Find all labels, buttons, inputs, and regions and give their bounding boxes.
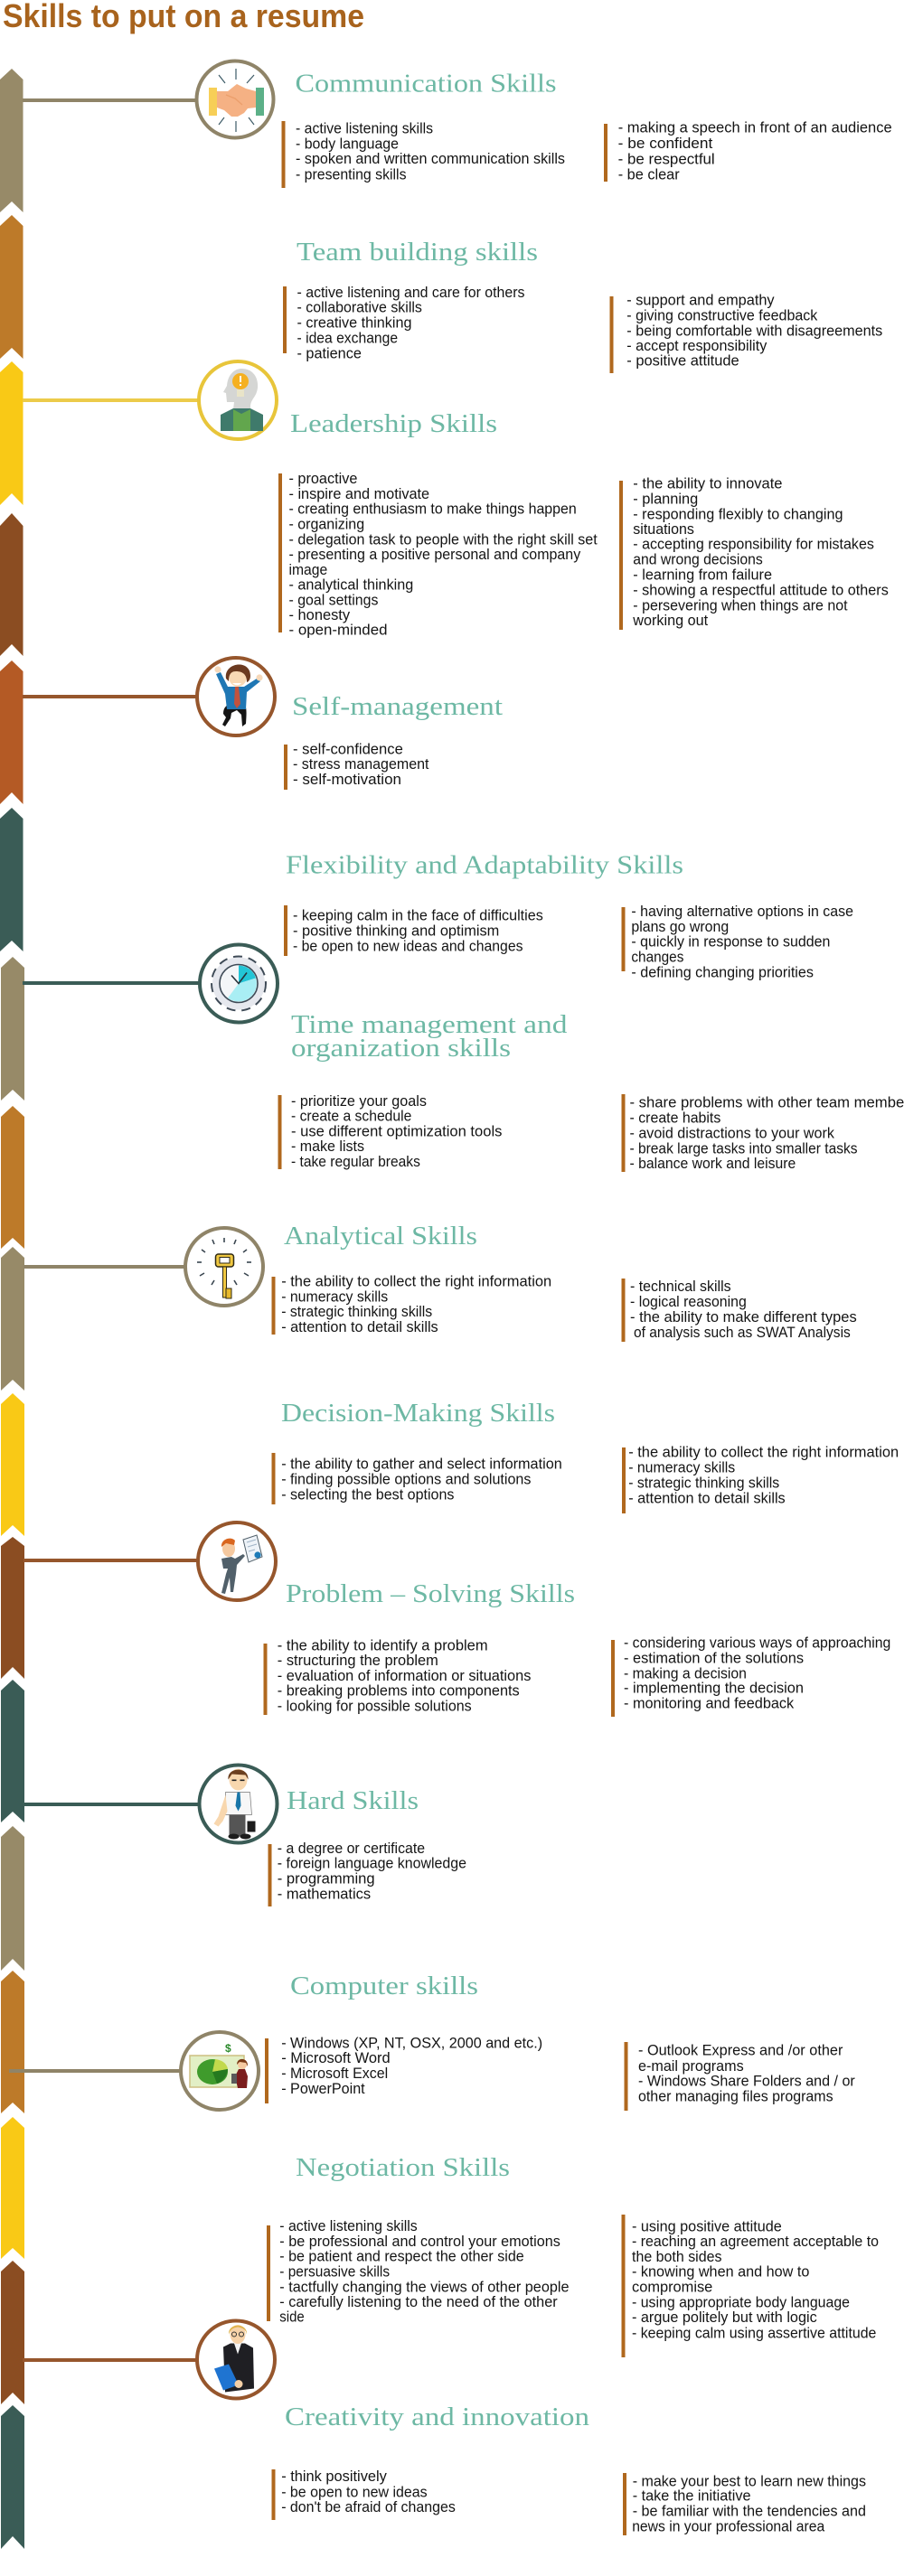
text block: negotiation left: - active listening skills [279, 2218, 418, 2234]
text block: team building right: - positive attitude [626, 353, 739, 370]
connector lines [9, 98, 201, 2362]
text block: analytical right [622, 1279, 857, 1342]
text block: time management left: - create a schedule [291, 1109, 411, 1125]
text block: leadership right: - showing a respectful attitude to others [633, 582, 889, 598]
text block: creativity left: - think positively [281, 2468, 388, 2485]
text block: communication right: - be respectful [618, 151, 715, 167]
text block: problem solving right: - considering various ways of approaching [624, 1635, 890, 1652]
text block: leadership left: - creating enthusiasm to make things happen [289, 501, 577, 518]
text block: time management right: - break large tasks into smaller tasks [629, 1140, 857, 1157]
text block: leadership right [619, 476, 889, 630]
text block: negotiation left: - carefully listening to the need of the other [279, 2294, 558, 2310]
text block: communication left: - body language [296, 136, 399, 152]
text block: self-management: - self-confidence [293, 741, 403, 757]
text block: problem solving left: - breaking problems into components [278, 1683, 520, 1700]
icon: businessman with briefcase [199, 1766, 277, 1843]
text block: team building left: - collaborative skills [297, 300, 422, 316]
text block: negotiation left: - be patient and respect the other side [279, 2249, 524, 2265]
text block: leadership left: image [289, 562, 327, 578]
text block: problem solving left: - looking for possible solutions [278, 1699, 472, 1715]
heading: Flexibility and Adaptability Skills: Flexibility and Adaptability Skills [286, 851, 683, 880]
text block: problem solving left: - the ability to identify a problem [278, 1637, 488, 1653]
text block: hard skills [268, 1841, 466, 1906]
heading: Computer skills: Computer skills [290, 1972, 478, 2000]
text block: analytical left: - numeracy skills [281, 1288, 388, 1305]
heading: Communication Skills: Communication Skills [295, 70, 557, 98]
text block: analytical right: - technical skills [630, 1279, 731, 1295]
text block: creativity left: - be open to new ideas [281, 2484, 428, 2500]
icon: leadership head with light bulb [199, 361, 277, 439]
heading: Decision-Making Skills: Decision-Making Skills [281, 1399, 555, 1428]
text block: communication left: - active listening skills [296, 120, 433, 136]
text block: problem solving left [264, 1637, 531, 1715]
text block: team building right: - being comfortable with disagreements [626, 323, 882, 339]
text block: communication right: - making a speech in front of an audience [618, 120, 892, 136]
text block: negotiation right: - keeping calm using assertive attitude [632, 2325, 876, 2341]
text block: time management left [278, 1093, 502, 1170]
text block: problem solving right [611, 1635, 890, 1717]
text block: leadership left: - open-minded [289, 623, 387, 639]
text block: leadership left: - organizing [289, 517, 364, 533]
text block: computer skills left: - Microsoft Word [281, 2050, 391, 2066]
text block: creativity right: - make your best to learn new things [633, 2473, 866, 2489]
text block: communication right: - be confident [618, 136, 713, 152]
text block: flexibility right: - defining changing priorities [631, 964, 814, 980]
text block: creativity left [271, 2468, 456, 2520]
heading: Analytical Skills: Analytical Skills [284, 1222, 477, 1251]
text block: negotiation left: side [279, 2309, 305, 2326]
timeline: segmented arrow column [0, 69, 24, 2549]
text block: leadership right: working out [632, 613, 709, 629]
text block: flexibility left: - positive thinking and optimism [293, 923, 499, 940]
text block: analytical right: of analysis such as SWAT Analysis [634, 1325, 851, 1341]
heading: Self-management: Self-management [292, 692, 503, 721]
text block: problem solving right: - monitoring and feedback [624, 1696, 795, 1712]
text block: analytical left: - attention to detail skills [281, 1319, 438, 1335]
text block: leadership right: - planning [633, 492, 698, 508]
text block: flexibility right: plans go wrong [631, 919, 729, 935]
text block: negotiation right: - reaching an agreement acceptable to [632, 2234, 879, 2250]
text block: time management right: - balance work and leisure [629, 1156, 796, 1172]
text block: leadership right: situations [633, 521, 694, 538]
text block: leadership right: - learning from failure [633, 567, 772, 584]
text block: decision-making right: - numeracy skills [628, 1459, 735, 1475]
text block: hard skills: - mathematics [278, 1886, 371, 1902]
text block: decision-making right: - the ability to collect the right information [628, 1445, 899, 1461]
text block: negotiation right: - using positive attitude [632, 2218, 782, 2234]
text block: negotiation right: - knowing when and how to [632, 2264, 809, 2281]
text block: creativity right [623, 2473, 866, 2535]
text block: analytical left: - strategic thinking skills [281, 1304, 432, 1320]
text block: communication right: - be clear [618, 167, 680, 183]
text block: decision-making left: - selecting the best options [281, 1486, 454, 1503]
text block: self-management [284, 741, 429, 790]
text block: problem solving right: - estimation of the solutions [624, 1650, 804, 1666]
text block: creativity right: news in your professional area [632, 2519, 825, 2535]
text block: communication right [604, 120, 892, 183]
text block: leadership left: - analytical thinking [289, 577, 413, 594]
text block: leadership left [278, 471, 598, 639]
text block: flexibility left [284, 905, 543, 956]
text block: problem solving left: - structuring the problem [278, 1653, 438, 1669]
text block: leadership left: - delegation task to people with the right skill set [289, 531, 598, 548]
text block: time management left: - prioritize your goals [291, 1093, 427, 1110]
text block: flexibility left: - keeping calm in the face of difficulties [293, 907, 543, 923]
text block: leadership right: - responding flexibly to changing [633, 506, 843, 522]
text block: team building right: - accept responsibility [626, 338, 767, 354]
text block: negotiation left: - persuasive skills [279, 2264, 390, 2281]
text block: time management left: - make lists [291, 1138, 364, 1155]
text block: negotiation right: the both sides [632, 2249, 721, 2265]
text block: problem solving left: - evaluation of information or situations [278, 1668, 531, 1684]
text block: analytical left: - the ability to collect the right information [281, 1273, 551, 1289]
text block: leadership left: - proactive [289, 471, 357, 487]
heading: Negotiation Skills: Negotiation Skills [296, 2153, 510, 2182]
text block: negotiation left [267, 2218, 570, 2326]
icon: presentation with pie chart: $ [225, 2042, 231, 2055]
icon: man with certificate [198, 1522, 276, 1600]
text block: flexibility left: - be open to new ideas and changes [293, 938, 523, 954]
text block: leadership left: - honesty [289, 607, 351, 623]
text block: flexibility right: - quickly in response to sudden [631, 934, 830, 951]
text block: leadership right: and wrong decisions [633, 552, 763, 568]
text block: analytical left [271, 1273, 551, 1335]
heading: Leadership Skills: Leadership Skills [290, 409, 497, 438]
text block: time management right: - avoid distractions to your work [629, 1125, 835, 1141]
text block: computer skills right: other managing files programs [638, 2089, 833, 2105]
text block: time management right [622, 1094, 904, 1172]
text block: creativity right: - be familiar with the tendencies and [633, 2503, 866, 2519]
heading: Time management and organization skills: Time management and [291, 1010, 568, 1039]
text block: self-management: - stress management [293, 756, 429, 773]
icon: presentation with pie chart [181, 2032, 259, 2110]
text block: hard skills: - foreign language knowledge [278, 1856, 466, 1872]
text block: problem solving right: - implementing the decision [624, 1681, 804, 1697]
text block: leadership right: - the ability to innovate [633, 476, 783, 492]
text block: time management right: - create habits [629, 1110, 720, 1127]
text block: self-management: - self-motivation [293, 772, 401, 788]
icon: handshake [197, 61, 273, 137]
text block: team building right [609, 293, 882, 373]
text block: time management left: - take regular breaks [291, 1154, 420, 1170]
text block: communication left [282, 120, 565, 188]
text block: negotiation right [622, 2215, 879, 2357]
heading: Time management and organization skills [291, 1010, 568, 1063]
icon: key [185, 1228, 263, 1306]
text block: decision-making right: - strategic thinking skills [628, 1475, 779, 1491]
text block: computer skills left: - PowerPoint [281, 2081, 365, 2097]
text block: communication left: - spoken and written communication skills [296, 151, 565, 167]
text block: computer skills right: e-mail programs [638, 2058, 744, 2075]
text block: team building left: - patience [297, 345, 362, 361]
heading: Time management and organization skills: organization skills [291, 1034, 511, 1063]
text block: leadership left: - inspire and motivate [289, 486, 429, 502]
text block: analytical right: - logical reasoning [630, 1294, 747, 1310]
icon: self-management man [197, 658, 275, 735]
text block: negotiation right: compromise [632, 2280, 712, 2296]
text block: team building left: - creative thinking [297, 315, 412, 332]
text block: leadership left: - presenting a positive personal and company [289, 547, 581, 563]
text block: computer skills right [624, 2042, 855, 2111]
text block: negotiation right: - using appropriate body language [632, 2294, 850, 2310]
text block: decision-making left: - finding possible options and solutions [281, 1472, 531, 1488]
text block: team building left [283, 285, 524, 361]
text block: decision-making right: - attention to detail skills [628, 1490, 786, 1506]
text block: negotiation left: - tactfully changing the views of other people [279, 2279, 570, 2295]
text block: leadership left: - goal settings [289, 592, 378, 608]
text block: team building right: - support and empathy [626, 293, 775, 309]
text block: computer skills left: - Microsoft Excel [281, 2065, 388, 2082]
text block: hard skills: - programming [278, 1871, 375, 1888]
text block: negotiation right: - argue politely but with logic [632, 2309, 817, 2326]
text block: computer skills left [265, 2035, 542, 2103]
text block: team building right: - giving constructive feedback [626, 307, 818, 323]
text block: team building left: - idea exchange [297, 330, 398, 346]
text block: flexibility right: - having alternative options in case [631, 904, 853, 920]
icon: businesswoman with clipboard [197, 2320, 275, 2398]
text block: computer skills right: - Outlook Express and /or other [638, 2043, 843, 2059]
text block: leadership right: - accepting responsibility for mistakes [633, 537, 874, 553]
text block: communication left: - presenting skills [296, 166, 407, 183]
heading: Creativity and innovation: Creativity and innovation [285, 2403, 590, 2431]
text block: flexibility right: changes [631, 949, 683, 965]
text block: creativity left: - don't be afraid of changes [281, 2499, 456, 2515]
text block: problem solving right: - making a decision [624, 1665, 747, 1681]
text block: decision-making left: - the ability to gather and select information [281, 1457, 562, 1473]
text block: leadership right: - persevering when things are not [633, 597, 848, 614]
icon: clock in gear [200, 945, 278, 1023]
text block: decision-making left [271, 1453, 562, 1504]
text block: team building left: - active listening and care for others [297, 285, 524, 301]
text block: analytical right: - the ability to make different types [630, 1309, 857, 1325]
text block: computer skills left: - Windows (XP, NT, OSX, 2000 and etc.) [281, 2035, 542, 2051]
text block: computer skills right: - Windows Share Folders and / or [638, 2073, 855, 2089]
text block: negotiation left: - be professional and control your emotions [279, 2234, 560, 2250]
heading: Team building skills: Team building skills [297, 238, 538, 267]
text block: time management left: - use different optimization tools [291, 1123, 502, 1139]
text block: hard skills: - a degree or certificate [278, 1841, 425, 1857]
text block: decision-making right [622, 1445, 899, 1513]
heading: Problem – Solving Skills: Problem – Solving Skills [286, 1579, 575, 1608]
text block: creativity right: - take the initiative [633, 2488, 750, 2505]
heading: Hard Skills: Hard Skills [287, 1786, 419, 1815]
text block: flexibility right [622, 904, 853, 980]
